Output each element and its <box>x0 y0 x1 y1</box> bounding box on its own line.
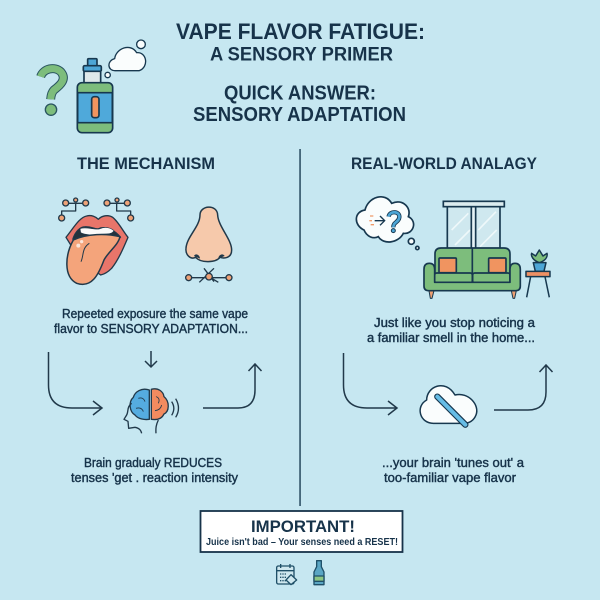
text: familiar smell: a familiar smell in the home... <box>367 331 535 345</box>
text: brain tunes out: too-familiar vape flavor <box>384 470 517 485</box>
center divider <box>299 149 301 506</box>
arrow: out of cloud curving up <box>494 365 552 410</box>
arrow: out of brain curving up <box>203 364 262 408</box>
icon: crossed-out cloud <box>420 386 477 425</box>
callout: important: IMPORTANT! <box>251 517 355 536</box>
arrow: left flow curve into brain <box>48 352 102 415</box>
text: brain reduces: tenses 'get . reaction intensity <box>71 471 239 485</box>
arrow: right flow curve into cloud <box>344 353 397 415</box>
text: familiar smell <box>367 316 535 345</box>
icon: juice bottle <box>314 561 324 585</box>
icon: mouth with tongue and neural connectors <box>59 198 134 284</box>
text: repeated exposure <box>54 307 248 336</box>
title block: VAPE FLAVOR FATIGUE: <box>176 19 425 44</box>
icon: question mark <box>41 69 63 115</box>
text: brain tunes out: ...your brain 'tunes out' a <box>382 455 525 470</box>
icon: nose with nerve node <box>186 207 232 282</box>
heading: the mechanism: THE MECHANISM <box>77 154 215 173</box>
text: repeated exposure: flavor to SENSORY ADAPTATION... <box>54 322 248 336</box>
quick answer heading: SENSORY ADAPTATION <box>193 104 406 126</box>
title block <box>176 19 425 66</box>
icon: thought bubble <box>356 197 419 250</box>
text: familiar smell: Just like you stop noticing a <box>374 316 535 330</box>
title block: A SENSORY PRIMER <box>210 44 393 66</box>
icon: side table with potted plant <box>526 250 550 297</box>
text: brain reduces: Brain gradualy REDUCES <box>84 456 222 470</box>
quick answer heading: QUICK ANSWER: <box>224 82 376 104</box>
icon: window <box>443 201 504 249</box>
callout: important: Juice isn't bad – Your senses need a RESET! <box>206 537 398 548</box>
text: brain tunes out <box>382 455 525 485</box>
icon: brain with head outline <box>124 389 178 433</box>
text: brain reduces <box>71 456 239 485</box>
heading: real-world analagy: REAL-WORLD ANALAGY <box>351 154 538 173</box>
callout: important <box>200 511 402 552</box>
icon: calendar <box>277 564 297 585</box>
quick answer heading <box>193 82 406 126</box>
icon: green sofa <box>424 248 520 298</box>
arrow: down to brain <box>145 351 157 367</box>
icon: vape device with vapor cloud <box>77 40 146 133</box>
text: repeated exposure: Repeeted exposure the same vape <box>62 307 248 321</box>
